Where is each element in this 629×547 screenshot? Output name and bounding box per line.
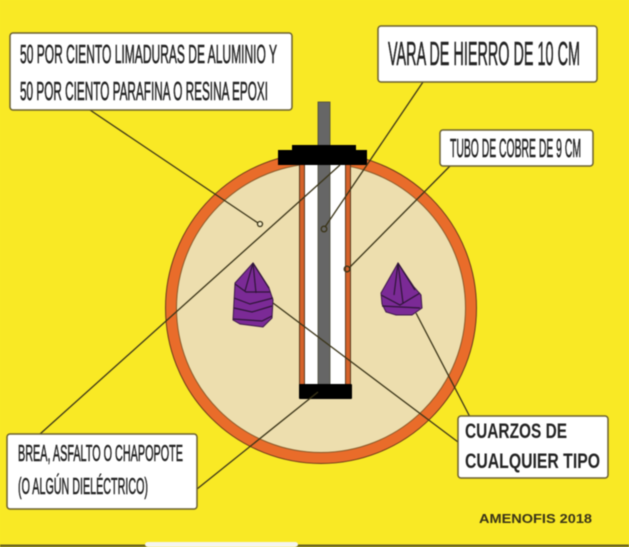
credit: AMENOFIS 2018 [479, 511, 592, 526]
label: iron rod [378, 26, 597, 82]
label: aluminium filings mix [10, 33, 292, 110]
iron rod [318, 102, 330, 390]
label: quartz: CUARZOS DE [465, 420, 567, 443]
label: tar or dielectric: (O ALGÚN DIELÉCTRICO) [18, 473, 148, 499]
right quartz crystal [381, 263, 422, 315]
label: quartz [458, 416, 608, 478]
bottom black cap [299, 384, 352, 399]
label: copper tube [440, 130, 593, 166]
top black cap [278, 145, 367, 165]
label: tar or dielectric: BREA, ASFALTO O CHAPOPOTE [18, 440, 183, 466]
diagram: circular device [166, 102, 476, 464]
copper tube [300, 160, 350, 390]
label: tar or dielectric [7, 434, 197, 509]
left quartz crystal [233, 263, 273, 327]
text: 50 POR CIENTO PARAFINA O RESINA EPOXI [20, 76, 268, 106]
outer orange copper ring with filled interior [171, 158, 471, 458]
leader lines [40, 82, 470, 489]
text: 50 POR CIENTO LIMADURAS DE ALUMINIO Y [20, 39, 277, 69]
